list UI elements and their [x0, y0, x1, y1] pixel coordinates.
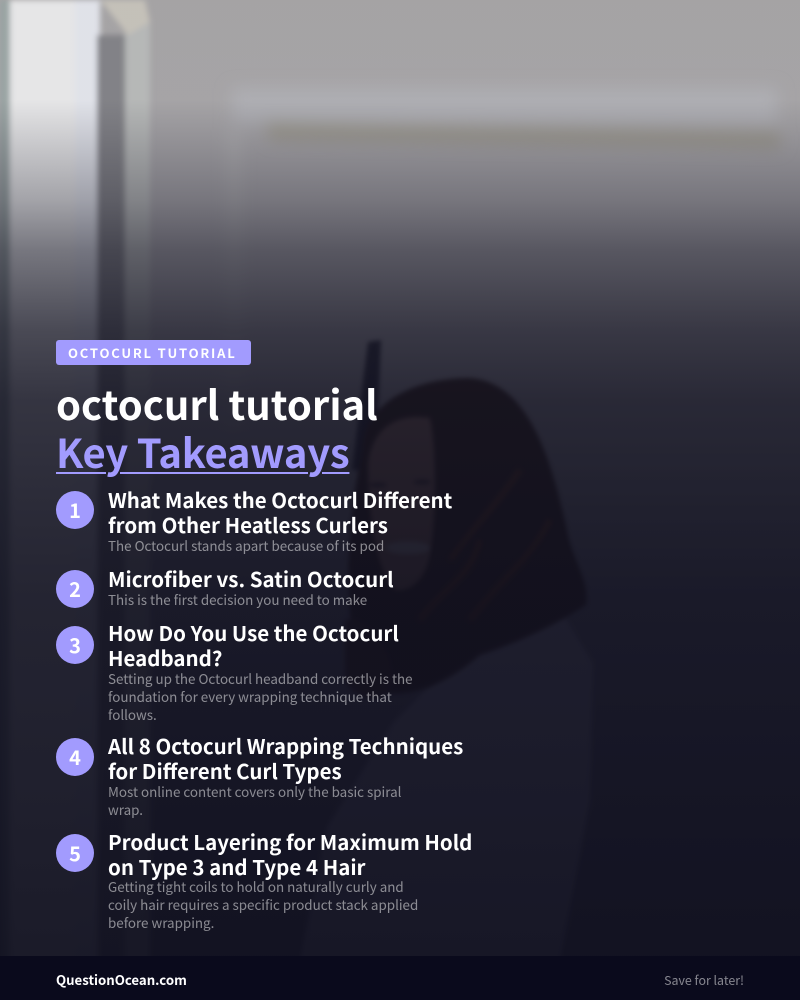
- title: octocurl tutorial: [56, 374, 378, 432]
- takeaway 4: Most online content covers only the basic spiral: [108, 781, 401, 801]
- takeaway 3: [56, 617, 413, 724]
- smile: [386, 542, 430, 554]
- takeaway 3: 3: [69, 630, 81, 659]
- takeaway 1: The Octocurl stands apart because of its pod: [108, 535, 384, 555]
- takeaway 3: How Do You Use the Octocurl: [108, 617, 399, 647]
- badge: category label: [56, 340, 251, 365]
- takeaway 1: What Makes the Octocurl Different: [108, 484, 452, 514]
- save prompt: Save for later!: [664, 971, 744, 989]
- takeaway 2: This is the first decision you need to make: [108, 589, 367, 609]
- face: [368, 417, 435, 590]
- takeaway 1: 1: [69, 495, 81, 524]
- takeaway 3: foundation for every wrapping technique that: [108, 686, 392, 706]
- takeaway 5: Getting tight coils to hold on naturally curly and: [108, 876, 404, 896]
- takeaway 3: Headband?: [108, 642, 222, 672]
- hair streaks: [420, 470, 550, 620]
- takeaway 5: 5: [69, 838, 81, 867]
- takeaway 1: [56, 484, 452, 555]
- takeaway 4: All 8 Octocurl Wrapping Techniques: [108, 730, 463, 760]
- takeaway 5: Product Layering for Maximum Hold: [108, 826, 472, 856]
- site name: QuestionOcean.com: [56, 970, 187, 989]
- takeaway 2: [56, 563, 394, 609]
- shirt: [300, 610, 593, 960]
- takeaway 2: Microfiber vs. Satin Octocurl: [108, 563, 394, 593]
- takeaway 3: follows.: [108, 704, 157, 724]
- takeaway 5: on Type 3 and Type 4 Hair: [108, 851, 366, 881]
- hair: [348, 378, 587, 694]
- takeaway 5: before wrapping.: [108, 912, 214, 932]
- footer bar: [0, 956, 800, 1000]
- takeaway 4: 4: [69, 742, 81, 771]
- eyes: [369, 482, 387, 488]
- badge: category label: OCTOCURL TUTORIAL: [68, 343, 237, 362]
- takeaway 3: Setting up the Octocurl headband correctly is the: [108, 668, 413, 688]
- takeaway 4: for Different Curl Types: [108, 755, 342, 785]
- hands: [345, 619, 392, 699]
- takeaway 5: [56, 826, 472, 932]
- takeaway 4: wrap.: [108, 799, 143, 819]
- takeaway 5: coily hair requires a specific product stack applied: [108, 894, 418, 914]
- title: [56, 374, 378, 480]
- takeaway 1: from Other Heatless Curlers: [108, 509, 388, 539]
- takeaway 4: [56, 730, 463, 819]
- takeaway 2: 2: [69, 574, 81, 603]
- title: Key Takeaways: [56, 422, 349, 480]
- curling iron: [352, 340, 381, 470]
